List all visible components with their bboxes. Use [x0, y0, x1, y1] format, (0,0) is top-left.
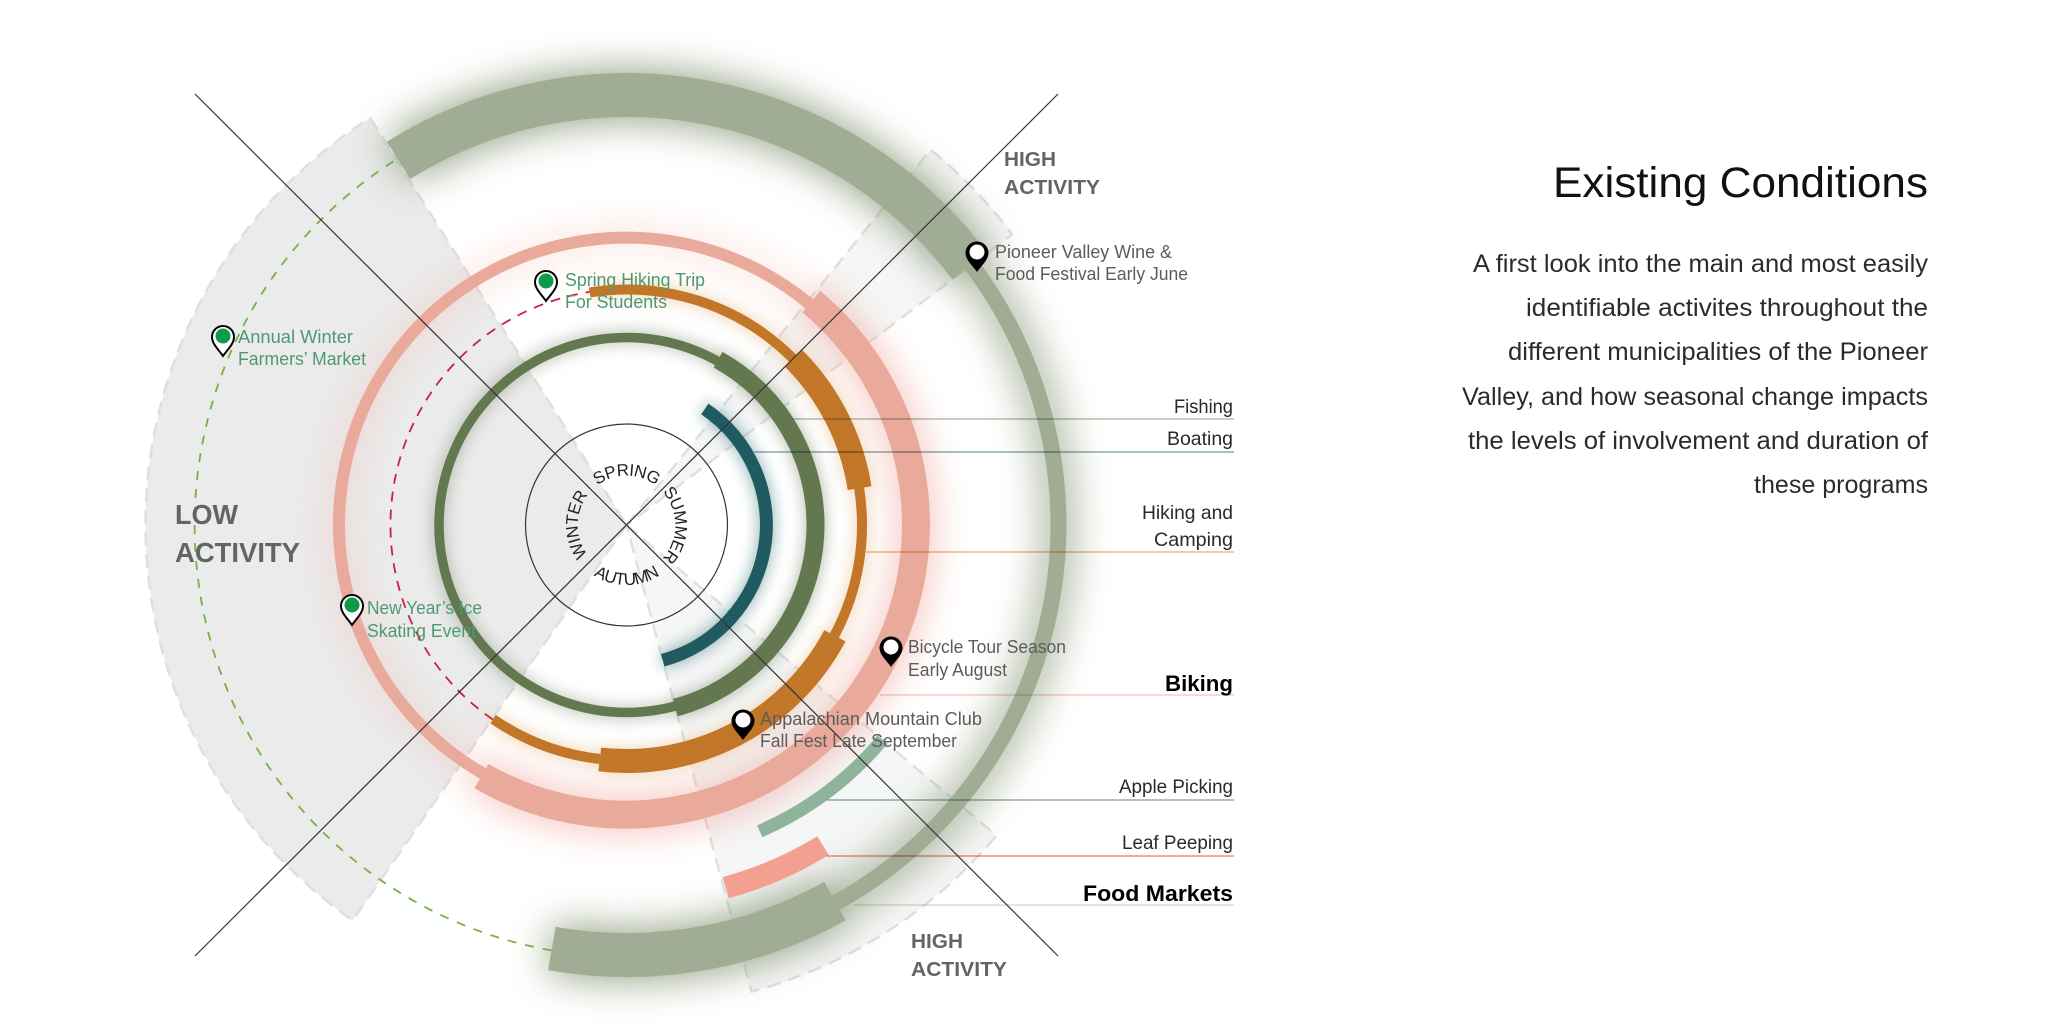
- arc: apple picking: [760, 740, 882, 831]
- title: Existing Conditions: [1553, 159, 1928, 207]
- event label: spring hiking trip: Spring Hiking Trip: [565, 270, 705, 290]
- label: hiking and camping: [1142, 502, 1233, 551]
- arc: leaf peeping: [726, 846, 823, 888]
- season label: winter: WINTER: [566, 490, 588, 561]
- event label: new year ice skating: New Year’s Ice: [367, 598, 482, 618]
- label: boating: Boating: [1167, 428, 1233, 450]
- panel: high activity wedge autumn: [626, 525, 996, 992]
- ring: fishing: [439, 338, 816, 712]
- event label: spring hiking trip: For Students: [565, 292, 667, 312]
- panel: low activity wedge: [146, 118, 627, 920]
- arc: boating: [663, 409, 766, 660]
- season circle: [526, 424, 728, 626]
- diagonal axis rising: [195, 94, 1058, 956]
- icon: green pin spring hiking: [535, 271, 557, 301]
- text block: description: A first look into the main and most easily: [1473, 250, 1929, 278]
- label: fishing: Fishing: [1174, 396, 1233, 418]
- glow: hiking ring: [493, 290, 862, 761]
- callout: high activity bottom: ACTIVITY: [911, 959, 1008, 981]
- text block: description: Valley, and how seasonal change impacts: [1462, 383, 1928, 411]
- leader lines: [754, 419, 1234, 905]
- glow: fishing ring: [438, 337, 816, 713]
- label: hiking and camping: Hiking and: [1142, 502, 1233, 524]
- season label: summer: SUMMER: [663, 486, 688, 564]
- text block: description: [1462, 250, 1929, 499]
- dashed line: winter hiking season: [390, 292, 590, 720]
- event label: appalachian mountain club: Appalachian Mountain Club: [760, 709, 982, 729]
- ring: hiking and camping: [493, 290, 862, 761]
- event label: wine and food festival: Pioneer Valley Wine &: [995, 242, 1172, 262]
- glow: boating arc: [663, 409, 766, 660]
- label: biking: Biking: [1165, 671, 1233, 696]
- callout: low activity: [175, 499, 300, 568]
- icon: black pin appalachian fest: [732, 710, 754, 740]
- event label: new year ice skating: [367, 598, 482, 641]
- event label: bicycle tour: Bicycle Tour Season: [908, 637, 1066, 657]
- callout: high activity top: [1004, 149, 1101, 199]
- season label: spring: SPRING: [594, 464, 660, 484]
- label: leaf peeping: Leaf Peeping: [1122, 832, 1233, 854]
- event label: appalachian mountain club: Fall Fest Late September: [760, 731, 957, 751]
- ring: food markets: [399, 95, 1058, 955]
- panel: high activity wedge early summer: [626, 150, 1012, 525]
- icon: black pin bicycle tour: [880, 636, 902, 667]
- label: apple picking: Apple Picking: [1119, 776, 1233, 798]
- dashed line: winter farmers market season: [195, 159, 551, 950]
- event label: bicycle tour: Early August: [908, 660, 1007, 680]
- season label: autumn: AUTUMN: [594, 566, 659, 586]
- event label: new year ice skating: Skating Event: [367, 621, 476, 641]
- event label: annual winter farmers market: Farmers’ Market: [238, 349, 366, 369]
- glow: food markets ring: [399, 95, 1058, 955]
- icon: green pin new year skating: [341, 595, 363, 625]
- event label: annual winter farmers market: [238, 327, 366, 369]
- callout: high activity top: HIGH: [1004, 149, 1056, 171]
- callout: high activity bottom: HIGH: [911, 931, 963, 953]
- icon: green pin annual winter market: [212, 326, 234, 356]
- text block: description: different municipalities of the Pioneer: [1508, 338, 1928, 366]
- diagonal axis falling: [195, 94, 1058, 956]
- ring: biking: [339, 238, 916, 815]
- event label: bicycle tour: [908, 637, 1066, 680]
- label: food markets: Food Markets: [1083, 881, 1233, 906]
- glow: biking ring: [339, 238, 916, 815]
- callout: low activity: ACTIVITY: [175, 537, 300, 568]
- text block: description: identifiable activites throughout the: [1526, 294, 1928, 322]
- text block: description: the levels of involvement and duration of: [1468, 427, 1928, 455]
- text block: description: these programs: [1754, 471, 1928, 499]
- icon: black pin wine festival: [966, 242, 988, 272]
- event label: wine and food festival: Food Festival Early June: [995, 264, 1188, 284]
- event label: appalachian mountain club: [760, 709, 982, 751]
- callout: high activity bottom: [911, 931, 1008, 981]
- event label: annual winter farmers market: Annual Winter: [238, 327, 353, 347]
- callout: low activity: LOW: [175, 499, 239, 530]
- event label: spring hiking trip: [565, 270, 705, 312]
- event label: wine and food festival: [995, 242, 1188, 284]
- callout: high activity top: ACTIVITY: [1004, 177, 1101, 199]
- label: hiking and camping: Camping: [1154, 529, 1233, 551]
